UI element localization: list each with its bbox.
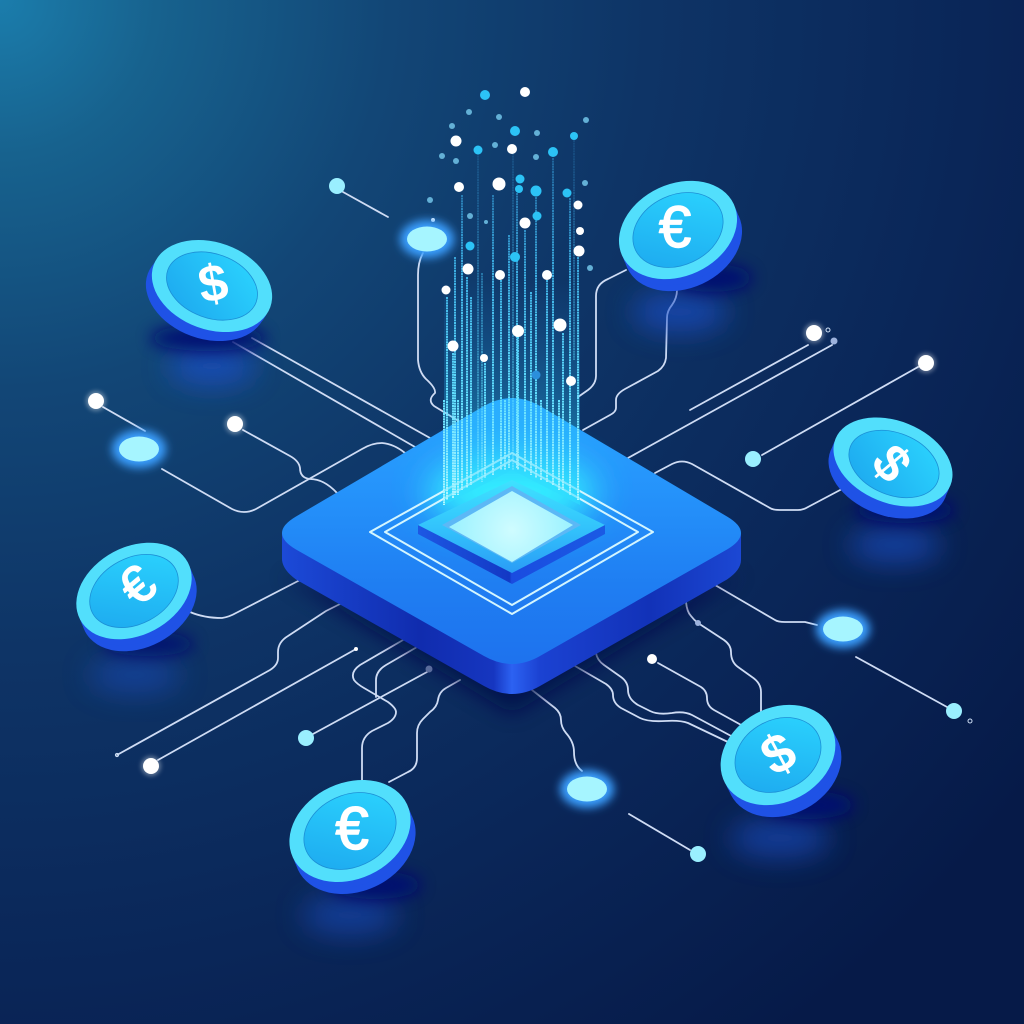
coin: dollar, top left: $: [194, 253, 233, 315]
data streams: [444, 140, 578, 505]
coin: dollar, right: [815, 401, 966, 563]
coin: euro, top right: €: [659, 195, 691, 260]
stream haze: [444, 280, 580, 505]
circuit traces: [103, 192, 947, 850]
chip top: [418, 480, 605, 573]
coin: dollar, bottom right: [703, 685, 859, 858]
rising particles: [427, 87, 593, 386]
glowing node: top: [400, 220, 454, 258]
glowing node: bottom: [560, 770, 614, 808]
platform top face: [282, 398, 741, 664]
small muted terminals: [426, 338, 838, 672]
glowing node: left: [112, 430, 166, 468]
coin: euro, left: €: [108, 554, 167, 617]
tiny rings: [115, 328, 972, 757]
coin: dollar, right: $: [860, 434, 923, 493]
frame traces: [370, 453, 653, 614]
coin: euro, bottom left: €: [335, 795, 369, 862]
central chip: [418, 480, 605, 584]
chip glow: [427, 456, 597, 528]
white terminals: [86, 323, 936, 776]
chip screen: [449, 491, 573, 562]
cyan terminals: [298, 178, 962, 862]
chip recess: [442, 486, 581, 563]
terminal dots: [86, 178, 972, 862]
dim particles: [427, 109, 593, 271]
coin: euro, bottom left: [273, 761, 432, 935]
coin: dollar, top left: [133, 224, 285, 386]
central platform: [282, 398, 741, 694]
coin: euro, left: [59, 524, 214, 693]
glowing node: right: [816, 610, 870, 648]
chip side: [418, 525, 605, 584]
white particles: [431, 87, 584, 386]
cyan particles: [466, 90, 578, 380]
platform side faces: [282, 533, 741, 694]
coin: euro, top right: [603, 162, 758, 332]
coin: dollar, bottom right: $: [751, 720, 806, 787]
platform shadow: [280, 574, 744, 714]
